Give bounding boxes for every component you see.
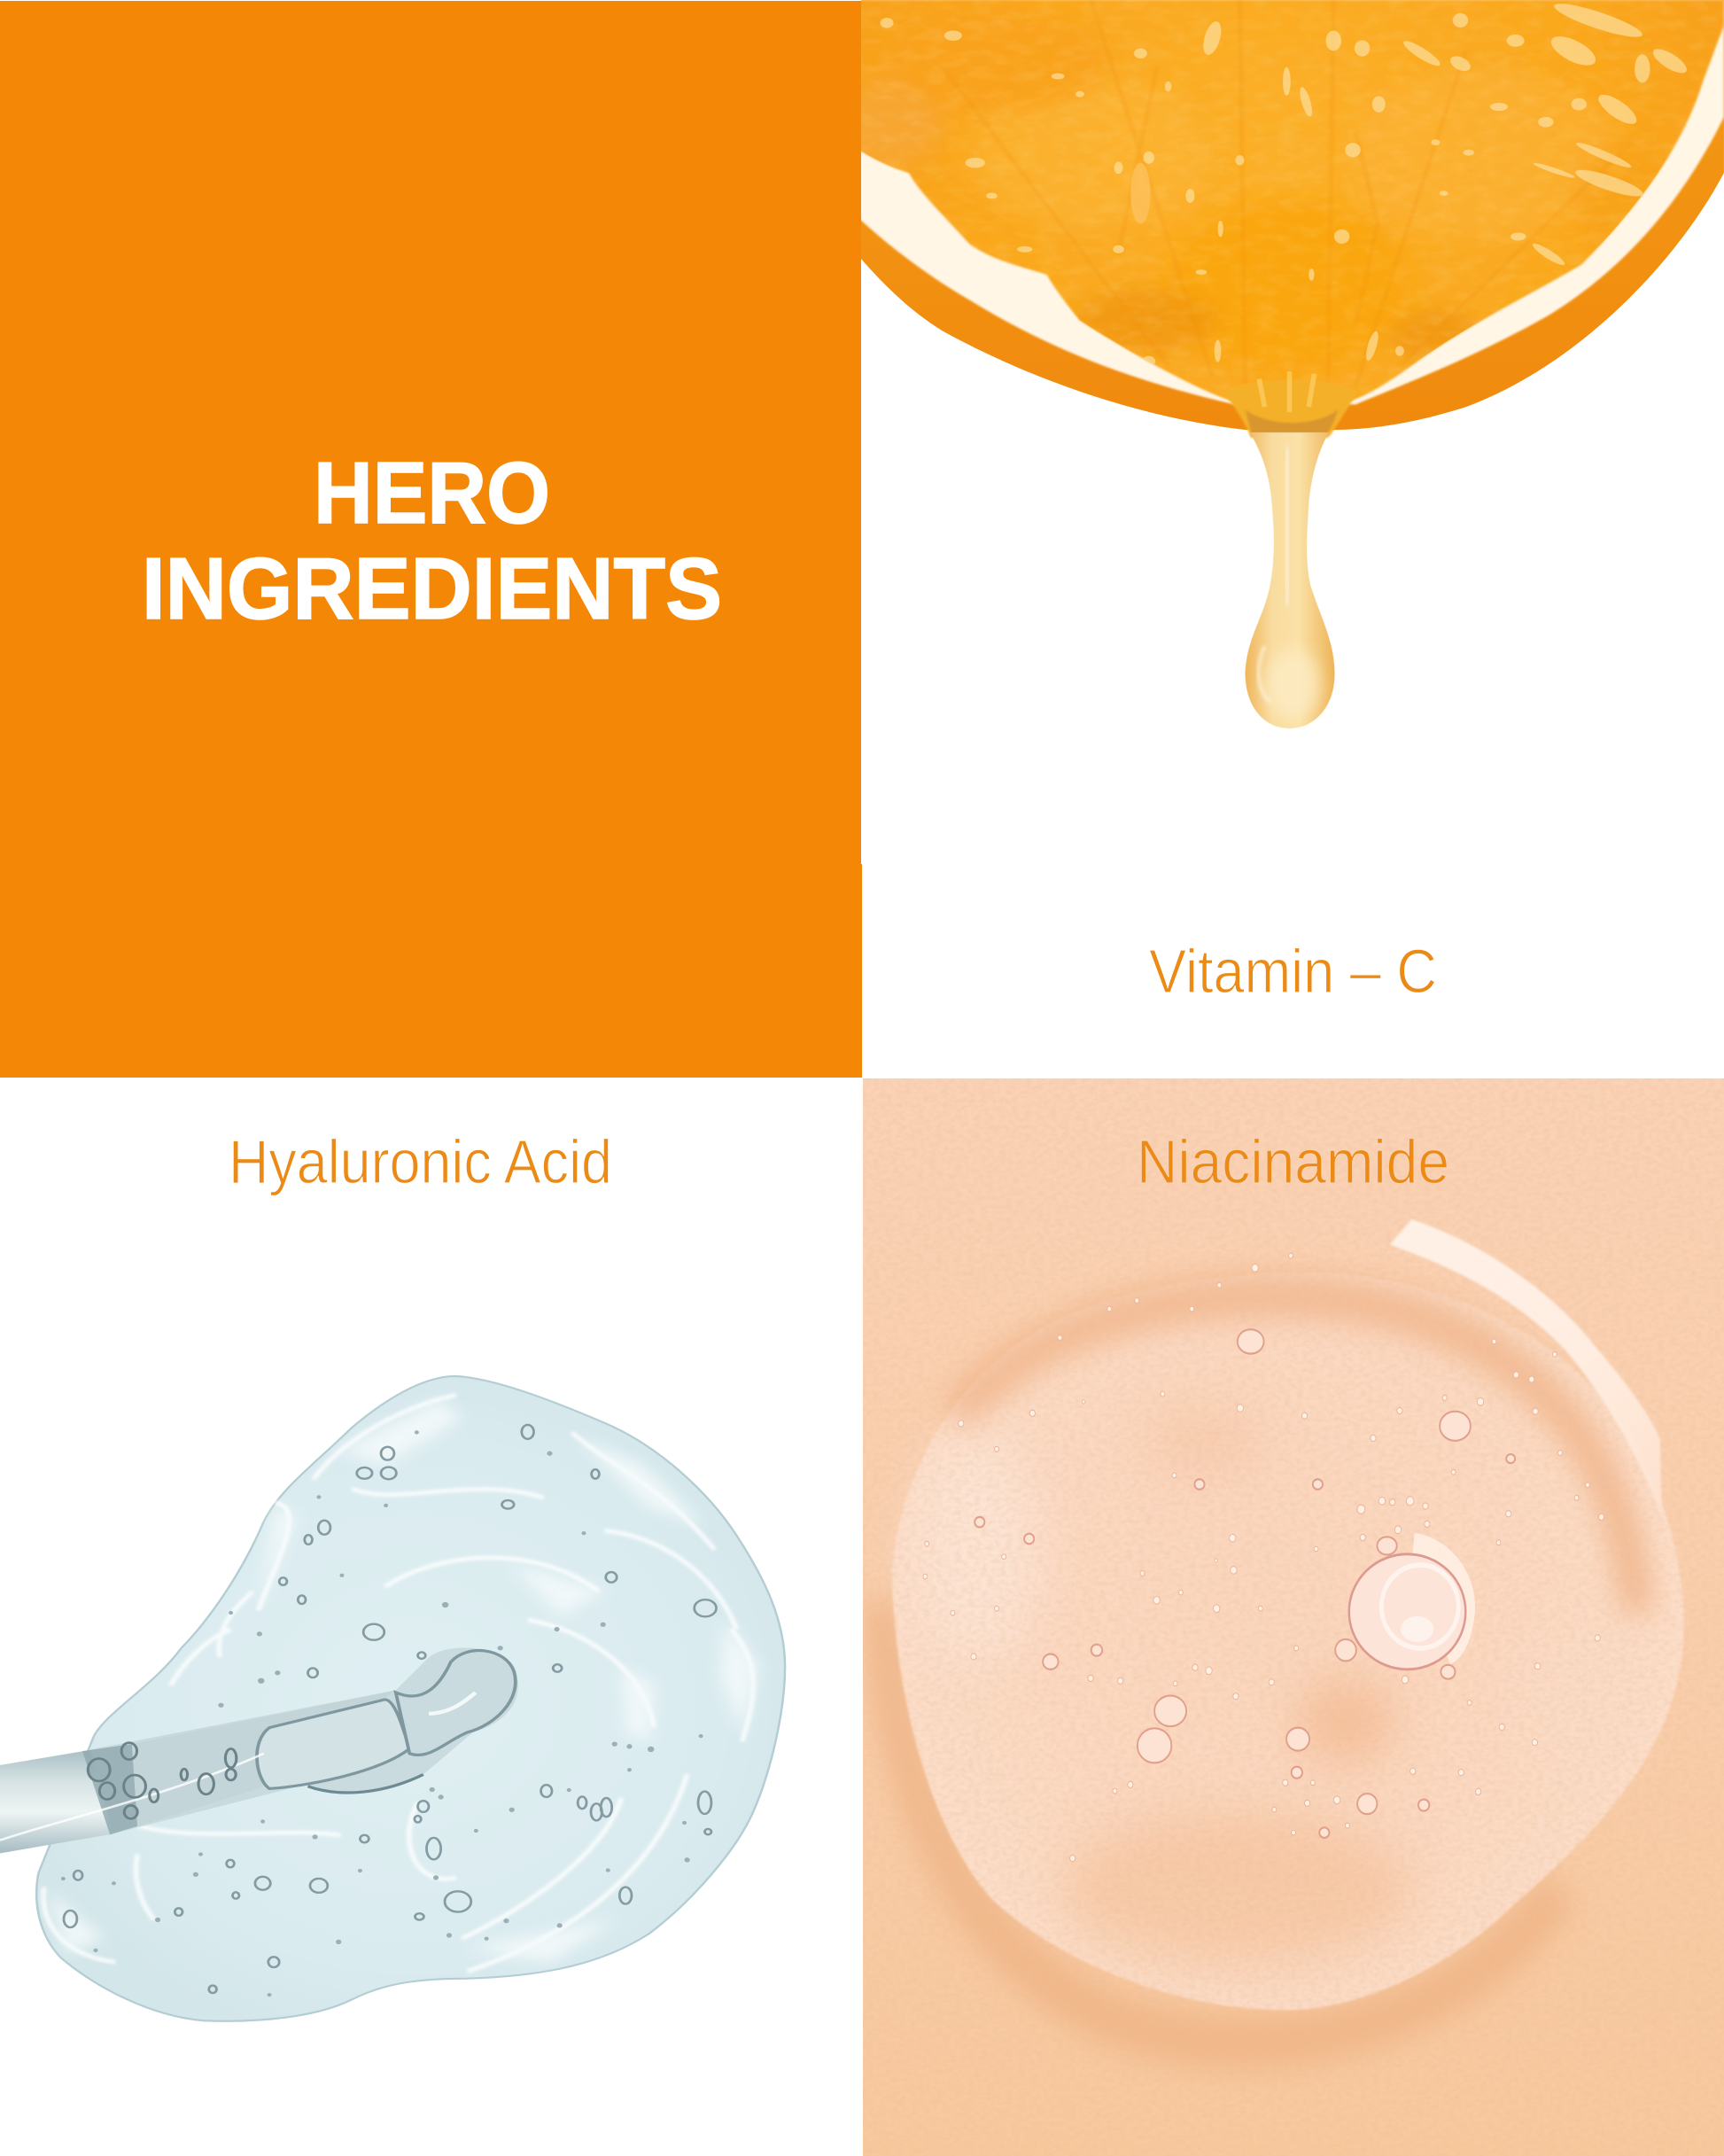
orange rind: [859, 0, 1724, 430]
soft gel sheen patches: [50, 1399, 758, 1962]
label: Niacinamide: Niacinamide: [1137, 1127, 1449, 1196]
panel: niacinamide: [863, 1078, 1724, 2156]
label: Hyaluronic Acid: Hyaluronic Acid: [229, 1127, 612, 1196]
juice drop: [1246, 432, 1335, 728]
juice pooling at slice base: [1223, 380, 1358, 438]
paper texture: [863, 1078, 1724, 2156]
panel: hyaluronic acid: [0, 1127, 785, 2021]
droplet rim shadow: [955, 1296, 1637, 1613]
droplet body: [892, 1273, 1684, 2010]
highlight band: [1390, 1219, 1662, 1517]
pulp segments and vesicles: [843, 0, 1724, 407]
droplet tonal patches: [912, 1408, 1637, 1965]
pulp: [859, 0, 1724, 401]
title: HERO: [314, 444, 550, 541]
white pith: [859, 0, 1724, 404]
label: Vitamin C: Vitamin – C: [1149, 937, 1437, 1006]
image: serum droplet base: [884, 1273, 1684, 2043]
gel micro bubbles: [61, 1430, 703, 1996]
droplet shadow: [884, 1600, 1560, 2043]
title: [142, 444, 722, 637]
gel blob: [36, 1376, 785, 2021]
panel: vitamin C: [843, 0, 1724, 1006]
peach background: [863, 1078, 1724, 2156]
gel bubbles: [64, 1425, 717, 1993]
image: serum droplet highlights and bubbles: [923, 1219, 1662, 1862]
large bubble: [1349, 1533, 1475, 1670]
title: INGREDIENTS: [142, 540, 722, 637]
medium bubbles: [975, 1329, 1515, 1838]
gel highlights: [43, 1395, 753, 1972]
micro bubbles: [923, 1253, 1604, 1862]
pipette: [0, 1647, 518, 1853]
image: gel blob with pipette: [0, 1376, 785, 2021]
image: orange slice with drip: [843, 0, 1724, 728]
panel: orange title block: [0, 1, 862, 1078]
